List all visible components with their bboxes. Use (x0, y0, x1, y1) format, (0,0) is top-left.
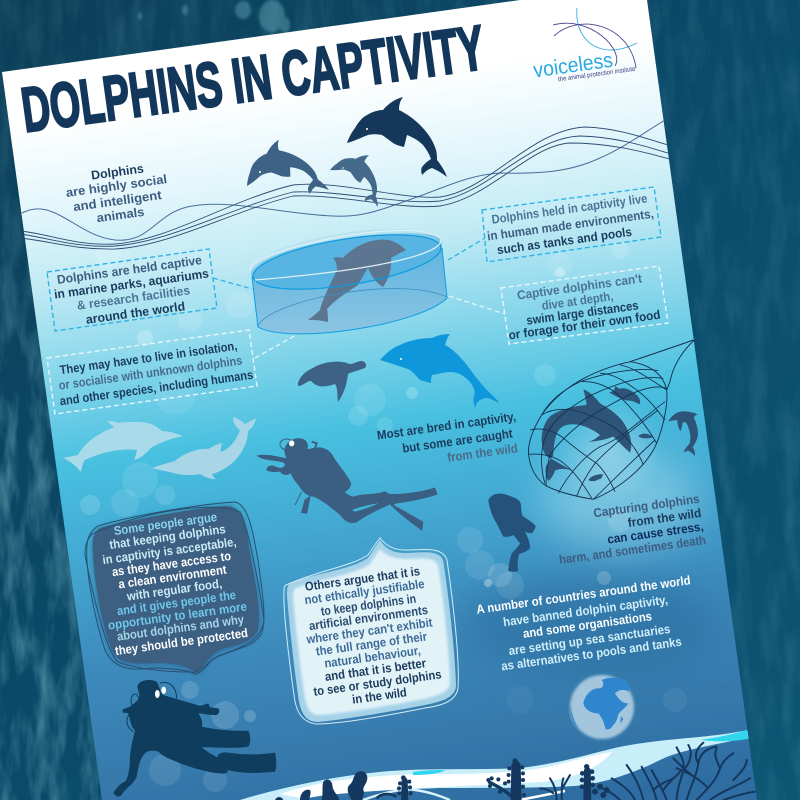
box: held captive: Dolphins are held captive (56, 253, 203, 287)
text: capturing dolphins: Capturing dolphins (592, 492, 700, 520)
text: dolphins are highly social: are highly social (65, 172, 168, 200)
net outline and handle (528, 340, 694, 499)
text: dolphins are highly social: animals (96, 205, 145, 225)
speech bubble: others argue: artificial environments (308, 603, 429, 633)
box: dive at depth (501, 266, 668, 344)
logo: voiceless (532, 8, 637, 83)
speech bubble: others argue (284, 538, 458, 724)
box: human made environments: such as tanks and pools (496, 225, 633, 257)
icon: net with captured dolphins (528, 340, 698, 503)
seaweed stalk (580, 764, 610, 800)
speech bubble: some people argue (85, 502, 264, 674)
logo: voiceless: voiceless (532, 49, 614, 82)
logo: voiceless: the animal protection institute (558, 66, 636, 83)
text: countries banning captivity: A number of countries around the world (476, 573, 691, 617)
icon: turtle (298, 361, 366, 402)
connector lines to tank (213, 238, 505, 358)
dolphin: bright blue (380, 334, 499, 408)
speech bubble: others argue: to keep dolphins in (320, 592, 417, 619)
speech bubble: some people argue: they should be protected (114, 626, 249, 658)
box: held captive: around the world (85, 299, 186, 327)
box: isolation: They may have to live in isolation, (59, 339, 238, 377)
text: capturing dolphins: from the wild (627, 506, 702, 530)
speech bubble: others argue: and that it is better (324, 656, 427, 684)
speech bubble: some people argue: Some people argue (113, 510, 218, 538)
box: human made environments: in human made environments, (486, 207, 655, 243)
diver: center (257, 438, 438, 531)
speech bubble: others argue: in the wild (351, 685, 408, 707)
box: held captive (47, 249, 217, 331)
dolphin: medium (237, 130, 329, 211)
poster tonal patches (460, 450, 720, 675)
coral branches (540, 743, 755, 800)
dolphin: large dark (347, 97, 447, 177)
sea floor: silhouettes (275, 743, 755, 800)
text: bred in captivity (376, 410, 519, 465)
speech bubble: others argue: the full range of their (315, 629, 428, 659)
speech bubble: others argue: Others argue that it is (304, 564, 421, 594)
box: held captive: & research facilities (76, 283, 191, 313)
speech bubble: others argue: not ethically justifiable (304, 577, 425, 607)
text: countries banning captivity: as alternatives to pools and tanks (500, 635, 683, 673)
text: dolphins are highly social: and intelligent (72, 188, 163, 214)
waves (20, 120, 670, 249)
speech bubble: some people argue: opportunity to learn more (107, 600, 248, 633)
speech bubble: others argue: natural behaviour, (323, 643, 421, 671)
diver: large foreground (113, 680, 276, 797)
dolphin: pale left (63, 421, 183, 472)
speech bubble: some people argue: about dolphins and why (116, 612, 245, 644)
text: countries banning captivity (476, 573, 691, 673)
netted small creatures (588, 386, 653, 481)
rock silhouettes (275, 758, 526, 800)
text: bred in captivity: from the wild (446, 441, 519, 465)
box: isolation (47, 330, 257, 414)
speech bubble: some people argue: a clean environment (118, 563, 228, 591)
text: capturing dolphins (558, 492, 707, 567)
captured dolphin (542, 389, 631, 481)
speech bubble: some people argue: with regular food, (125, 577, 223, 604)
box: held captive: in marine parks, aquariums (53, 266, 210, 302)
box: dive at depth: Captive dolphins can't (516, 271, 644, 303)
text: bred in captivity: but some are caught (402, 426, 514, 456)
box: dive at depth: swim large distances (526, 298, 639, 328)
box: dive at depth: dive at depth, (541, 289, 614, 313)
tank with dolphin (247, 218, 447, 334)
text: countries banning captivity: and some organisations (522, 609, 653, 641)
text: capturing dolphins: harm, and sometimes death (558, 533, 707, 567)
bokeh bubbles (80, 241, 687, 792)
speech bubble: some people argue: in captivity is acceptable, (102, 535, 237, 567)
dolphin: pale right (152, 417, 256, 479)
text: countries banning captivity: are setting up sea sanctuaries (508, 622, 671, 658)
text: dolphins are highly social: Dolphins (90, 161, 145, 183)
icon: globe (570, 675, 634, 739)
speech bubble: some people argue: and it gives people the (116, 588, 237, 618)
text: capturing dolphins: can cause stress, (606, 519, 704, 547)
text: bred in captivity: Most are bred in captivity, (376, 410, 517, 443)
dolphin beside net (668, 411, 698, 456)
speech bubble: others argue: to see or study dolphins (313, 667, 442, 699)
box: human made environments (482, 187, 661, 262)
dolphin: small (324, 145, 393, 207)
box: isolation: and other species, including humans (59, 368, 254, 408)
text: countries banning captivity: have banned dolphin captivity, (502, 593, 669, 629)
text: dolphins are highly social (65, 161, 168, 225)
sea floor: waves (240, 729, 752, 800)
tank dolphin (308, 240, 406, 322)
diver: small vertical (488, 494, 536, 572)
net mesh (529, 365, 667, 499)
speech bubble: others argue: where they can't exhibit (305, 615, 434, 647)
speech bubble: some people argue: as they have access to (111, 549, 232, 579)
speech bubble: some people argue: that keeping dolphins (109, 522, 226, 552)
box: human made environments: Dolphins held in captivity live (491, 191, 648, 227)
box: dive at depth: or forage for their own food (508, 308, 661, 342)
box: isolation: or socialise with unknown dolphins (58, 353, 243, 393)
